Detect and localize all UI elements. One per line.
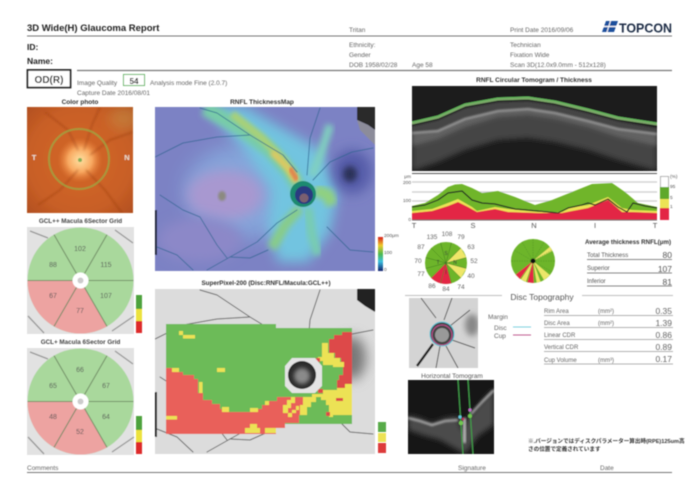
scan details: Scan 3D(12.0x9.0mm - 512x128) — [510, 62, 606, 69]
image quality: Analysis mode Fine (2.0.7) — [150, 80, 227, 87]
chart: clock-hour thickness pie: 108 — [442, 231, 453, 238]
logo: Topcon: TOPCON — [619, 20, 672, 36]
note: Japanese footnote: ※.バージョンではディスクパラメーター算出時(RPE)125um高 — [528, 437, 685, 445]
chart: clock-hour thickness pie: 40 — [467, 273, 475, 280]
header: report title: 3D Wide(H) Glaucoma Report — [27, 23, 160, 34]
chart: RNFL thickness profile — [403, 174, 658, 230]
patient details: Gender — [349, 52, 372, 59]
table: average RNFL thickness: Total Thickness — [587, 253, 628, 259]
panel: GCL++ sector grid — [27, 227, 134, 334]
table: disc parameters: (mm³) — [598, 358, 614, 364]
superpixel: green base blocks — [166, 324, 352, 434]
panel: GCL+ sector grid — [27, 348, 134, 455]
chart: clock-hour thickness pie: 70 — [414, 258, 422, 265]
chart: RNFL thickness profile: 200 — [403, 180, 411, 186]
legend: disc margin: Disc — [494, 325, 507, 332]
panel: disc image — [409, 298, 479, 368]
footer: date label: Date — [600, 465, 614, 472]
header: print date: Print Date 2016/09/06 — [510, 27, 574, 34]
chart: RNFL thickness profile: N — [531, 221, 537, 230]
legend: thickness percentile bar: 95 — [670, 184, 676, 190]
legend: thickness color scale: 0 — [384, 267, 387, 273]
heading: horizontal tomogram: Horizontal Tomogram — [421, 373, 483, 380]
capture date: Capture Date 2016/08/01 — [77, 90, 150, 97]
panel: color fundus photo: T — [32, 153, 37, 162]
chart: RNFL thickness profile: I — [594, 221, 596, 230]
table: disc parameters: Linear CDR — [544, 333, 576, 339]
table: disc parameters: 0.35 — [655, 306, 672, 316]
panel: color fundus photo: N — [124, 153, 130, 162]
chart: clock-hour thickness pie: 52 — [470, 258, 478, 265]
panel: GCL+ sector grid: 52 — [76, 429, 84, 436]
table: disc parameters: (mm²) — [598, 321, 614, 327]
legend: GCL++ percentile bar — [136, 295, 142, 333]
table: average RNFL thickness: 80 — [663, 250, 672, 260]
chart: RNFL thickness profile: T — [412, 221, 417, 230]
panel: RNFL thickness map — [155, 107, 375, 271]
heading: color photo: Color photo — [62, 99, 98, 106]
footer: comments label: Comments — [27, 465, 59, 472]
table: disc parameters: Disc Area — [544, 321, 570, 327]
table: average RNFL thickness: 81 — [663, 277, 672, 287]
chart: clock-hour thickness pie: 74 — [457, 284, 465, 291]
chart: yellow borderline band — [412, 197, 657, 220]
panel: circular tomogram — [412, 86, 657, 171]
panel: color fundus photo — [27, 106, 141, 213]
heading: RNFL thickness map: RNFL ThicknessMap — [230, 99, 294, 106]
patient name label: Name: — [27, 56, 53, 66]
heading: RNFL circular tomogram: RNFL Circular Tomogram / Thickness — [476, 77, 592, 84]
scan details: Fixation Wide — [510, 52, 550, 59]
chart: clock-hour thickness pie: 63 — [467, 244, 475, 251]
legend: thickness color scale — [378, 233, 399, 273]
table: disc parameters — [544, 306, 673, 364]
panel: GCL++ sector grid: 115 — [100, 262, 112, 269]
chart: RNFL thickness profile: T — [653, 221, 658, 230]
chart: RNFL thickness profile: S — [470, 221, 476, 230]
table: average RNFL thickness: Average thickness RNFL(μm) — [585, 239, 671, 246]
chart: clock-hour thickness pie: S — [444, 251, 448, 257]
patient ID label: ID: — [27, 42, 38, 52]
heading: GCL++ grid: GCL++ Macula 6Sector Grid — [39, 218, 122, 225]
patient details — [349, 42, 433, 69]
panel: GCL+ sector grid: 48 — [49, 414, 57, 421]
table: average RNFL thickness: Inferior — [587, 279, 606, 285]
table: disc parameters: 0.86 — [655, 330, 672, 340]
legend: thickness percentile bar: 5 — [670, 195, 673, 201]
table: average RNFL thickness: 107 — [658, 264, 672, 274]
panel: GCL++ sector grid: 77 — [76, 308, 84, 315]
legend: thickness color scale: 200μm — [384, 233, 399, 239]
superpixel: abnormal cells — [166, 331, 352, 434]
table: disc parameters: Cup Volume — [544, 358, 577, 364]
legend: SuperPixel percentile bar — [378, 422, 386, 453]
image quality: Image Quality — [77, 80, 118, 87]
legend: thickness color scale: 100 — [384, 250, 392, 256]
table: disc parameters: 0.17 — [655, 354, 672, 364]
scan details: Technician — [510, 42, 541, 49]
legend: disc margin: Cup — [494, 333, 506, 340]
table: average RNFL thickness — [585, 239, 672, 287]
chart: clock-hour thickness pie: 77 — [417, 271, 425, 278]
table: disc parameters: (mm²) — [598, 309, 614, 315]
chart: clock-hour thickness pie: N — [453, 260, 457, 266]
heading: GCL+ grid: GCL+ Macula 6Sector Grid — [41, 339, 120, 346]
note: Japanese footnote: さの位置で定義されています — [528, 445, 601, 453]
panel: horizontal tomogram — [408, 380, 494, 454]
legend: thickness percentile bar: 1 — [670, 204, 673, 210]
panel: GCL++ sector grid: 88 — [49, 262, 57, 269]
chart: RNFL thickness profile: μm — [404, 175, 411, 180]
chart: RNFL thickness profile: 0 — [408, 217, 411, 223]
patient details: Age 58 — [412, 62, 433, 69]
superpixel: optic disc — [285, 358, 322, 393]
chart: red abnormal band — [412, 200, 657, 220]
header: device name: Tritan — [349, 27, 366, 34]
panel: GCL++ sector grid: 67 — [49, 293, 57, 300]
chart: fine sector pie — [511, 239, 555, 283]
chart: clock-hour thickness pie: T — [436, 260, 440, 266]
patient details: Ethnicity: — [349, 42, 376, 49]
chart: clock-hour thickness pie: 79 — [457, 234, 465, 241]
scan details — [510, 42, 606, 69]
image quality — [77, 74, 227, 87]
chart: clock-hour thickness pie: I — [445, 270, 447, 276]
legend: thickness percentile bar: (%) — [670, 174, 678, 180]
eye badge: OD(R): OD(R) — [35, 75, 63, 86]
legend: disc margin — [488, 314, 531, 340]
table: disc parameters: Vertical CDR — [544, 345, 579, 351]
footer: signature label: Signature — [458, 465, 486, 472]
heading: disc topography: Disc Topography — [510, 292, 574, 302]
chart: green normal band — [412, 183, 657, 220]
panel: GCL+ sector grid: 66 — [76, 367, 84, 374]
table: average RNFL thickness: Superior — [587, 266, 610, 272]
panel: SuperPixel-200 map — [155, 289, 375, 454]
legend: thickness percentile bar — [660, 174, 678, 220]
chart: clock-hour thickness pie — [414, 231, 478, 293]
chart: measured thickness line — [412, 191, 657, 213]
legend: GCL+ percentile bar — [136, 416, 142, 454]
note: Japanese footnote — [528, 437, 685, 453]
eye badge: OD(R) — [28, 70, 70, 88]
panel: GCL++ sector grid: 107 — [100, 293, 112, 300]
chart: clock-hour thickness pie: 84 — [442, 286, 450, 293]
table: disc parameters: 1.39 — [655, 318, 672, 328]
image quality: 54 — [130, 77, 139, 86]
table: disc parameters: Rim Area — [544, 309, 569, 315]
chart: clock-hour thickness pie: 86 — [428, 283, 436, 290]
chart: RNFL thickness profile: 100 — [403, 198, 411, 204]
chart: clock-hour thickness pie: 87 — [417, 244, 425, 251]
table: disc parameters: 0.89 — [655, 342, 672, 352]
patient details: DOB 1958/02/28 — [349, 62, 398, 69]
legend: disc margin: Margin — [488, 314, 508, 321]
panel: GCL+ sector grid: 64 — [102, 414, 110, 421]
heading: SuperPixel-200: SuperPixel-200 (Disc:RNFL/Macula:GCL++) — [201, 280, 331, 287]
panel: GCL+ sector grid: 65 — [49, 383, 57, 390]
panel: GCL++ sector grid: 102 — [74, 246, 86, 253]
chart: clock-hour thickness pie: 135 — [427, 234, 438, 241]
panel: GCL+ sector grid: 67 — [102, 383, 110, 390]
